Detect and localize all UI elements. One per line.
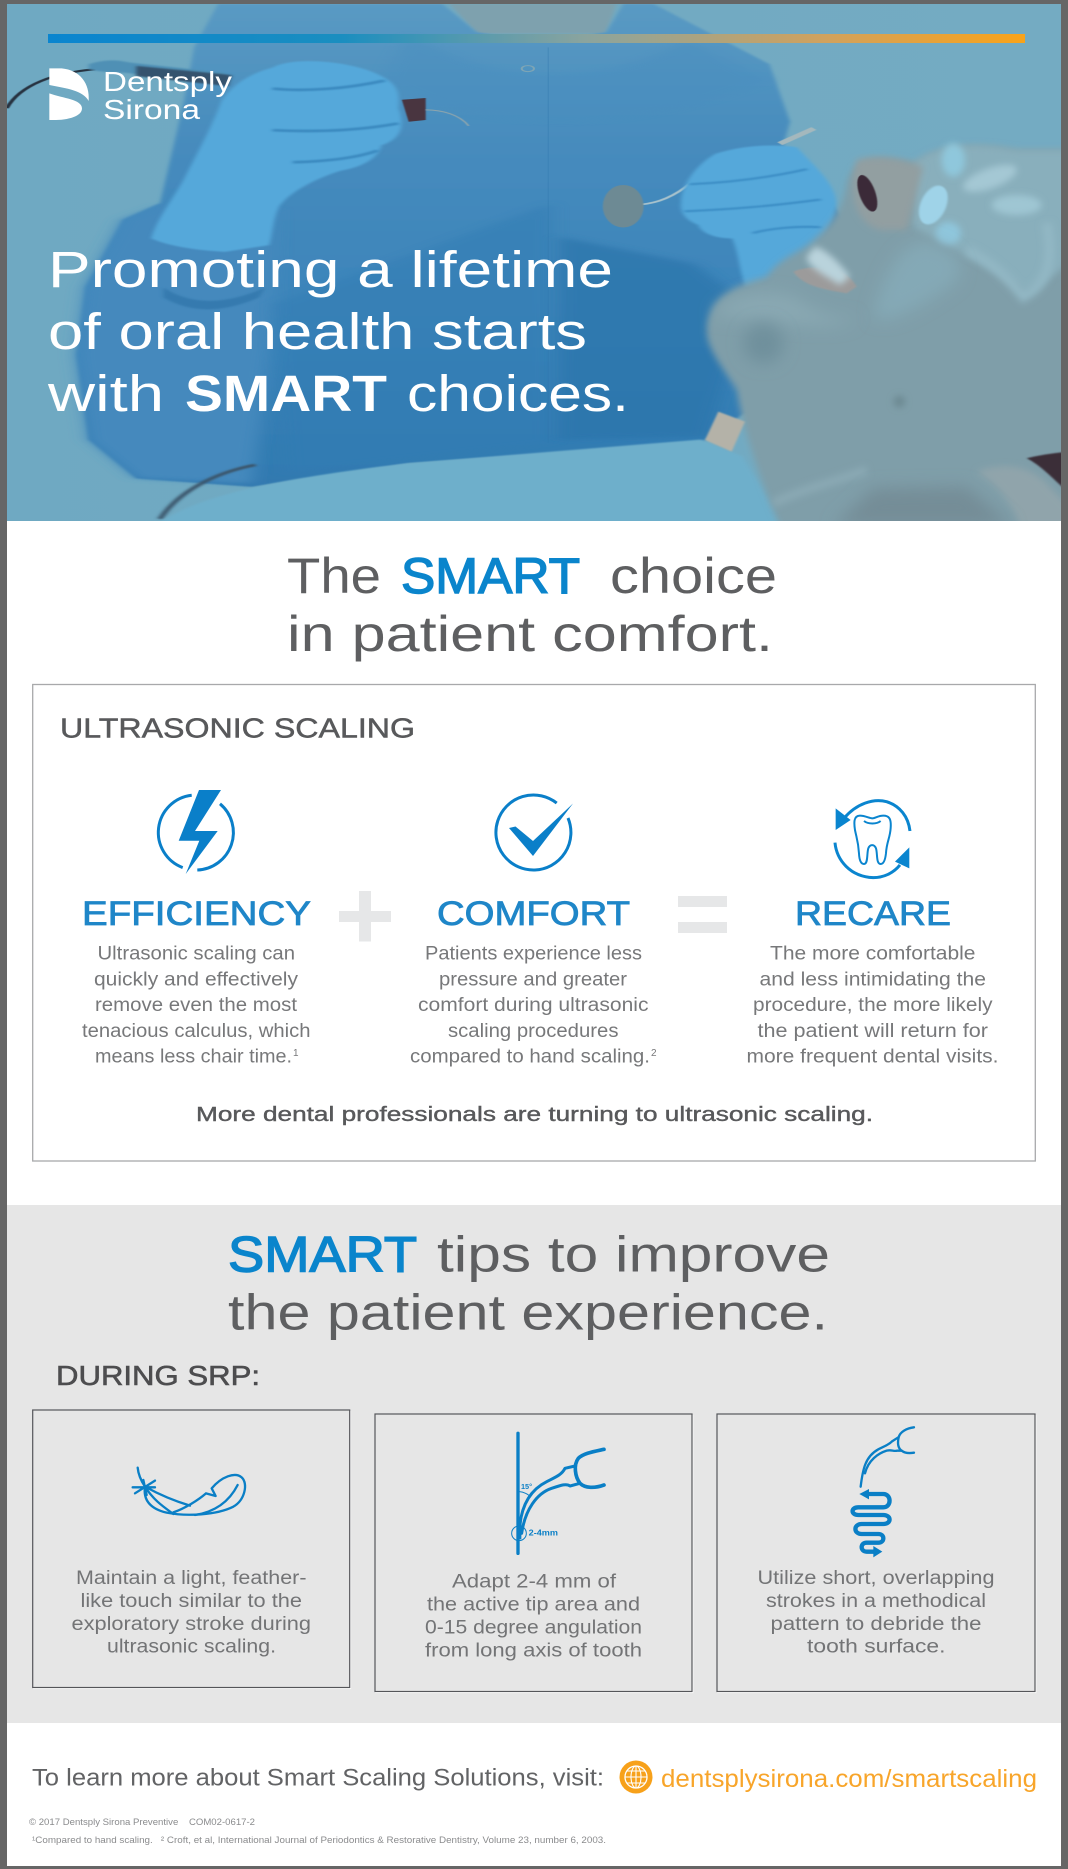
card text: like touch similar to the: [80, 1591, 302, 1612]
card text: pattern to debride the: [770, 1614, 982, 1635]
hero headline: choices.: [407, 365, 629, 422]
icon: feather: [133, 1468, 245, 1515]
card text: exploratory stroke during: [72, 1614, 311, 1635]
card text: Adapt 2-4 mm of: [452, 1572, 617, 1592]
card text: ultrasonic scaling.: [107, 1636, 276, 1658]
comfort column: pressure and greater: [439, 970, 628, 990]
card: feather touch: [33, 1410, 350, 1688]
recare column: the patient will return for: [758, 1021, 989, 1042]
recare column: more frequent dental visits.: [746, 1046, 998, 1068]
comfort column: COMFORT: [437, 895, 630, 933]
footer: [29, 1760, 1037, 1846]
gradient bar: [48, 34, 1025, 43]
heading: The SMART choice in patient comfort: SMART: [401, 548, 580, 604]
mirror handle: [642, 184, 688, 205]
recare column: procedure, the more likely: [753, 995, 993, 1016]
recare column: [746, 895, 998, 1068]
icon: scaler at 15 degrees: [512, 1433, 604, 1553]
comfort column: comfort during ultrasonic: [418, 995, 648, 1016]
cable and handpiece: [7, 69, 95, 108]
icon: tooth with recare arrows: [835, 801, 910, 878]
icon: lightning bolt: [158, 790, 233, 874]
tips heading: SMART: [228, 1226, 417, 1282]
recare column: and less intimidating the: [760, 970, 986, 990]
heading: The SMART choice in patient comfort: choice: [610, 548, 777, 604]
card text: [72, 1568, 311, 1658]
patient face: [705, 143, 1068, 527]
comfort column: [410, 895, 657, 1068]
logo: Dentsply Sirona: [49, 66, 232, 125]
lips and teeth: [793, 267, 857, 293]
card text: Maintain a light, feather-: [76, 1568, 306, 1589]
hero headline: SMART: [185, 365, 387, 422]
tips heading: tips to improve: [437, 1226, 830, 1282]
hero headline: Promoting a lifetime: [48, 241, 613, 298]
card text: strokes in a methodical: [766, 1591, 986, 1612]
logo: Dentsply Sirona: Dentsply: [103, 66, 232, 97]
card text: [758, 1568, 994, 1658]
panel: ultrasonic scaling: [33, 684, 1035, 1161]
right glove: [681, 145, 836, 287]
efficiency column: Ultrasonic scaling can: [98, 944, 295, 964]
tips heading: the patient experience.: [228, 1284, 828, 1340]
efficiency column: remove even the most: [95, 995, 298, 1016]
icon: globe: [620, 1760, 652, 1794]
right instrument handle: [780, 128, 814, 144]
card text: the active tip area and: [427, 1594, 640, 1616]
recare column: RECARE: [795, 895, 951, 933]
panel conclusion: More dental professionals are turning to ultrasonic scaling.: [196, 1104, 873, 1126]
left glove: [151, 61, 402, 252]
comfort column: scaling procedures: [448, 1021, 618, 1042]
call to action: To learn more about Smart Scaling Solutions, visit:: [32, 1764, 604, 1792]
comfort column: 2: [651, 1048, 657, 1059]
card: overlapping strokes: [717, 1414, 1036, 1692]
tips heading: [228, 1226, 830, 1340]
card text: Utilize short, overlapping: [758, 1568, 994, 1589]
footnotes: ¹Compared to hand scaling. ² Croft, et al, International Journal of Periodontics & Restorative Dentistry, Volume 23, number 6, 2003.: [32, 1835, 606, 1846]
efficiency column: quickly and effectively: [94, 970, 299, 990]
card: adaptation: [375, 1414, 693, 1692]
hero panel: [7, 4, 1068, 527]
website link: dentsplysirona.com/smartscaling: [661, 1765, 1037, 1793]
panel: SMART tips: [7, 1205, 1061, 1723]
scaler tip: [402, 98, 426, 122]
hero headline: of oral health starts: [48, 303, 587, 360]
logo: Dentsply Sirona: Sirona: [103, 94, 201, 125]
hero photo: dentist and patient: [7, 4, 1068, 527]
icon: serpentine strokes: [853, 1427, 914, 1557]
hero headline: with: [47, 365, 164, 422]
sheet: [160, 440, 783, 522]
dark chair arc: [160, 465, 255, 519]
heading: The SMART choice in patient comfort: The: [287, 548, 381, 604]
card text: tooth surface.: [807, 1636, 946, 1658]
plus sign: [339, 891, 391, 942]
lower lip and dark area: [1026, 452, 1061, 488]
icon: check mark: [496, 795, 573, 870]
heading: The SMART choice in patient comfort: in patient comfort.: [287, 606, 773, 662]
copyright: © 2017 Dentsply Sirona Preventive COM02-0617-2: [29, 1817, 255, 1828]
efficiency column: EFFICIENCY: [82, 895, 311, 933]
card text: [425, 1572, 642, 1662]
equals sign: [678, 896, 727, 933]
coat: [76, 4, 845, 487]
sleeve shade: [76, 206, 276, 483]
icon: scaler at 15 degrees: 2-4mm: [529, 1528, 558, 1538]
hero headline: [47, 241, 629, 422]
panel heading: ULTRASONIC SCALING: [60, 712, 415, 744]
efficiency column: tenacious calculus, which: [82, 1021, 310, 1042]
mirror: [603, 185, 644, 228]
neck: [450, 4, 616, 34]
comfort column: Patients experience less: [425, 944, 642, 964]
heading: The SMART choice in patient comfort: [287, 548, 777, 662]
recare column: The more comfortable: [770, 944, 976, 964]
subheading: during SRP: DURING SRP:: [56, 1360, 260, 1391]
efficiency column: 1: [293, 1048, 299, 1059]
neck fold: [776, 470, 862, 502]
efficiency column: [82, 895, 311, 1068]
icon: scaler at 15 degrees: 15°: [521, 1482, 532, 1491]
efficiency column: means less chair time.: [95, 1046, 292, 1068]
comfort column: compared to hand scaling.: [410, 1046, 650, 1068]
card text: from long axis of tooth: [425, 1640, 642, 1662]
gauze block: [705, 412, 745, 452]
card text: 0-15 degree angulation: [425, 1618, 642, 1638]
